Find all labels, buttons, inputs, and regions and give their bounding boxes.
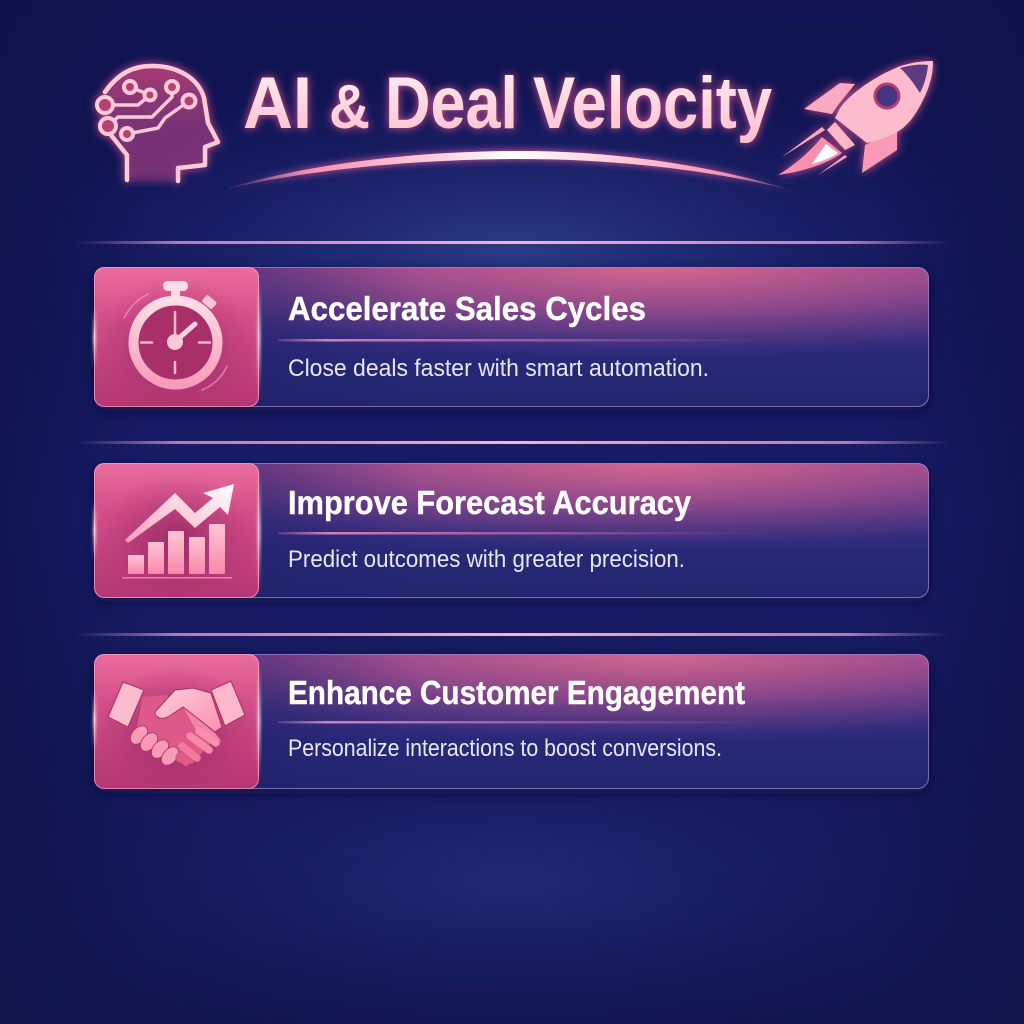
divider 1 <box>75 241 950 244</box>
heading: Enhance Customer Engagement <box>288 674 745 711</box>
icon tile: stopwatch <box>93 267 260 407</box>
icon: AI brain head <box>97 66 218 181</box>
description: Predict outcomes with greater precision. <box>288 546 685 573</box>
title: Deal <box>385 63 518 144</box>
title <box>243 63 772 144</box>
heading: Improve Forecast Accuracy <box>288 484 692 521</box>
panel: improve forecast accuracy <box>93 463 929 598</box>
panel: enhance customer engagement <box>93 654 929 789</box>
icon: rocket <box>778 61 933 175</box>
description: Close deals faster with smart automation. <box>288 355 709 382</box>
title swoosh <box>223 151 797 192</box>
icon tile: handshake <box>93 654 260 789</box>
panel: accelerate sales cycles <box>93 267 929 407</box>
divider 2 <box>75 441 950 444</box>
icon tile: growth chart <box>93 463 260 598</box>
title: AI <box>243 63 312 144</box>
title: & <box>329 73 370 142</box>
divider 3 <box>75 633 950 636</box>
title: Velocity <box>533 63 772 144</box>
description: Personalize interactions to boost conversions. <box>288 735 722 762</box>
heading: Accelerate Sales Cycles <box>288 290 646 327</box>
